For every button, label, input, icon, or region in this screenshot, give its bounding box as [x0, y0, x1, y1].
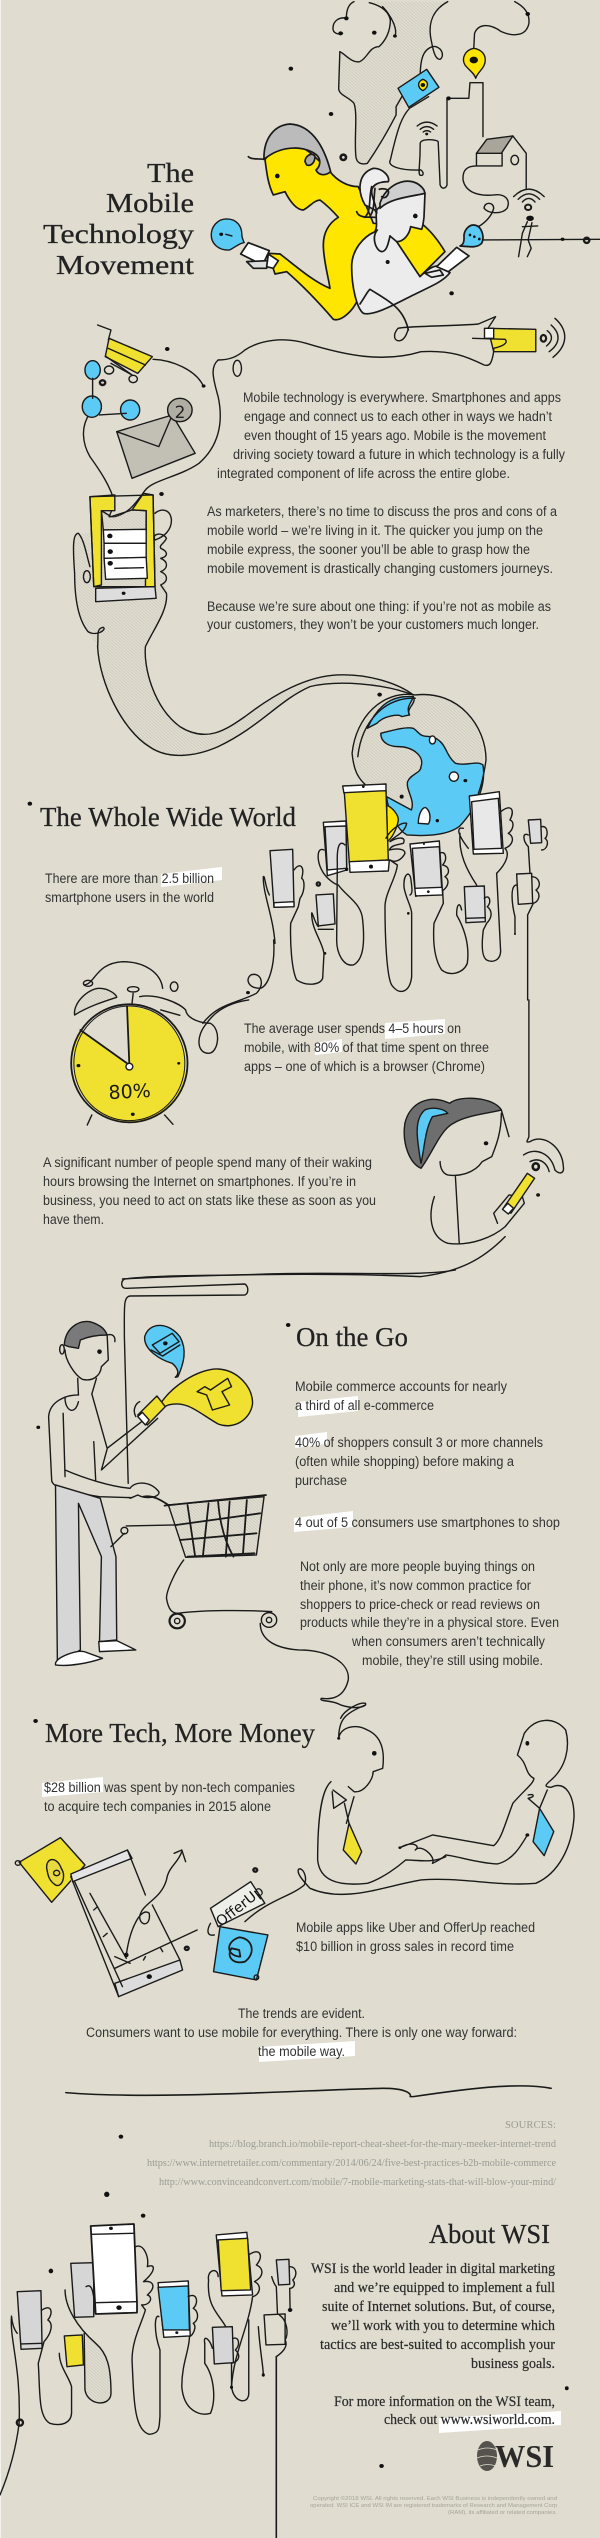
text: money stats and closing: Consumers want to use mobile for everything. There is only one way forward: — [86, 2025, 517, 2040]
dots — [28, 802, 32, 806]
icon: yellow note — [15, 1838, 85, 1902]
figure: man in yellow — [248, 124, 445, 320]
text: world stats: The average user spends 4–5 hours on — [244, 1021, 461, 1036]
icon: small grey phone with hand — [272, 2259, 296, 2313]
text: on the go stats — [295, 1379, 560, 1668]
copyright: Copyright ©2018 WSI. All rights reserved. Each WSI Business is independently owned and — [313, 2495, 557, 2502]
illustration: mobile intro line art, phone, arm and globe — [73, 317, 565, 836]
icon: blue phone — [158, 2281, 214, 2414]
illustration: two businessmen, tablet and app tags — [15, 1705, 574, 2097]
intro text: engage and connect us to each other in ways we hadn’t — [244, 409, 552, 424]
icon: small yellow phone — [64, 2335, 83, 2367]
figure: businessman with blue tie — [245, 1720, 574, 1922]
decorative dots — [289, 16, 454, 295]
line to lower figure — [527, 1000, 564, 1173]
text: on the go stats: 40% of shoppers consult 3 or more channels — [295, 1435, 543, 1450]
figure: woman in light grey — [352, 168, 450, 330]
dots — [317, 795, 439, 955]
text: on the go stats: (often while shopping) before making a — [295, 1454, 514, 1469]
copyright — [310, 2495, 558, 2516]
tag text: OfferUp — [213, 1883, 267, 1930]
text: on the go stats: their phone, it’s now common practice for — [300, 1578, 531, 1593]
icon: yellow map pin — [464, 2, 530, 78]
sources: http://www.convinceandconvert.com/mobile/7-mobile-marketing-stats-that-will-blow-your-mind/ — [159, 2177, 556, 2188]
icon: OfferUp tag — [210, 1882, 265, 1927]
text: world stats: business, you need to act on stats like these as soon as you — [43, 1193, 376, 1208]
text: money stats and closing: to acquire tech companies in 2015 alone — [44, 1799, 271, 1814]
icon: blue app card — [208, 1923, 268, 1980]
icon: globe — [352, 693, 486, 836]
section heading: About WSI: About WSI — [429, 2219, 550, 2249]
figure: businessman with yellow tie — [318, 1705, 446, 1884]
sources: SOURCES: — [505, 2120, 556, 2131]
text: world stats: have them. — [43, 1212, 104, 1227]
icon: raised hand with phone 3 — [318, 821, 364, 965]
text: on the go stats: products while they’re in a physical store. Even — [300, 1615, 559, 1630]
text: on the go stats: mobile, they’re still using mobile. — [362, 1653, 543, 1668]
text: world stats — [43, 871, 489, 1227]
section heading: The Whole Wide World: The Whole Wide World — [40, 802, 296, 832]
icon: thought bubble outline — [83, 360, 220, 517]
clock percent label: 80% — [108, 1080, 151, 1104]
intro text: As marketers, there’s no time to discuss the pros and cons of a — [207, 504, 557, 519]
icon: large light phone 6 — [459, 792, 513, 885]
text: money stats and closing: $28 billion was spent by non-tech companies — [44, 1780, 295, 1795]
title: Movement — [56, 250, 195, 280]
sources: https://blog.branch.io/mobile-report-cheat-sheet-for-the-mary-meeker-internet-trend — [209, 2139, 557, 2150]
illustration: man shopping with cart — [36, 1270, 455, 1718]
text: money stats and closing: Mobile apps like Uber and OfferUp reached — [296, 1920, 535, 1935]
icon: outlined phone with hand — [258, 2314, 287, 2538]
intro text — [207, 390, 565, 632]
illustration: hands holding phones under the globe — [263, 784, 547, 1000]
copyright: operated. WSI ICE and WSI IM are registered trademarks of Research and Management Corp — [310, 2503, 557, 2509]
text: about WSI — [311, 2261, 556, 2428]
icon: cart — [111, 1495, 366, 1718]
icon: grey phone 7 — [204, 2327, 239, 2387]
text: about WSI: business goals. — [471, 2356, 555, 2372]
icon: wifi signal — [417, 122, 437, 135]
intro text: mobile movement is drastically changing customers journeys. — [207, 561, 553, 576]
text: about WSI: WSI is the world leader in digital marketing — [311, 2261, 555, 2277]
title: Mobile — [106, 188, 194, 218]
title: Technology — [43, 219, 195, 249]
icon: blue speech bubble left — [211, 219, 244, 250]
text: world stats: smartphone users in the world — [45, 890, 214, 905]
icon: big white phone — [91, 2224, 160, 2434]
intro text: your customers, they won’t be your customers much longer. — [207, 617, 539, 632]
icon: small phone 5 — [464, 873, 501, 961]
sources: https://www.internetretailer.com/commentary/2014/06/24/five-best-practices-b2b-mobile-commerce — [147, 2158, 556, 2169]
figure: man with phone — [49, 1321, 159, 1665]
icon: alarm clock — [71, 940, 274, 1125]
icon: small far phone 7 and hand 8 — [512, 819, 547, 1000]
icon: blue network nodes — [82, 347, 170, 420]
text: money stats and closing: The trends are evident. — [238, 2006, 365, 2021]
illustration: alarm clock and woman — [28, 802, 564, 1279]
icon: blue money drop — [145, 1325, 184, 1377]
text: on the go stats: shoppers to price-check or read reviews on — [300, 1597, 540, 1612]
text: about WSI: For more information on the WSI team, — [334, 2394, 555, 2410]
icon: blue speech bubble right — [460, 225, 483, 247]
stat highlight marks — [294, 1396, 358, 1532]
decorative ring dot — [341, 155, 346, 160]
icon: yellow speech blob with shirt — [138, 1369, 253, 1426]
dots — [36, 1323, 290, 1429]
text: money stats and closing — [44, 1780, 535, 2059]
figure: woman with phone — [122, 1098, 555, 1279]
icon: yellow phone in hand — [343, 784, 412, 991]
intro text: driving society toward a future in which technology is a fully — [233, 447, 565, 462]
stat highlight marks — [42, 1777, 355, 2062]
text: on the go stats: 4 out of 5 consumers use smartphones to shop — [295, 1515, 560, 1530]
icon: shopping cart — [98, 325, 206, 388]
icon: raised hand with phone 4 — [410, 841, 468, 973]
text: world stats: hours browsing the Internet on smartphones. If you’re in — [43, 1174, 356, 1189]
text: on the go stats: Not only are more people buying things on — [300, 1559, 535, 1574]
intro text: even thought of 15 years ago. Mobile is the movement — [244, 428, 546, 443]
text: on the go stats: a third of all e-commerce — [295, 1398, 434, 1413]
title: The — [147, 158, 194, 188]
text: on the go stats: Mobile commerce accounts for nearly — [295, 1379, 507, 1394]
text: on the go stats: when consumers aren’t technically — [351, 1634, 545, 1649]
text: about WSI: suite of Internet solutions. But, of course, — [322, 2299, 555, 2315]
icon: hand with grey phone 1 — [263, 849, 324, 984]
icon: house — [463, 136, 526, 227]
icon: blue phone with pin — [398, 69, 439, 107]
icon: hatched arm lower edge — [98, 647, 413, 755]
icon: envelope badge number: 2 — [175, 403, 185, 423]
icon: yellow phone in outstretched hand — [218, 317, 565, 376]
link highlight — [439, 2411, 561, 2433]
copyright: (RAM), its affiliated or related companies. — [448, 2510, 558, 2516]
intro text: integrated component of life across the entire globe. — [217, 466, 510, 481]
dots — [49, 2135, 569, 2468]
illustration: raised hands with phones — [0, 2135, 569, 2538]
icon: white phone left — [241, 243, 278, 268]
logo: WSI: WSI — [495, 2438, 554, 2474]
title — [43, 158, 195, 280]
illustration: two people on phones — [241, 124, 483, 330]
text: world stats: mobile, with 80% of that time spent on three — [244, 1040, 489, 1055]
icon: small walking person with wifi — [482, 189, 600, 257]
icon: small grey phone 2 — [316, 894, 335, 929]
text: money stats and closing: the mobile way. — [258, 2044, 345, 2059]
sources — [147, 2120, 557, 2188]
intro text: mobile express, the sooner you’ll be able to grasp how the — [207, 542, 530, 557]
icon: phone with list in hatched hand — [73, 492, 413, 755]
text: world stats: A significant number of people spend many of their waking — [43, 1155, 372, 1170]
icon: grey phone behind hatched arm — [65, 2263, 111, 2403]
text: about WSI: we’ll work with you to determine which — [331, 2318, 556, 2334]
intro text: Because we’re sure about one thing: if you’re not as mobile as — [207, 599, 551, 614]
icon: yellow phone — [208, 2232, 262, 2401]
section heading: On the Go: On the Go — [296, 1322, 408, 1352]
stat highlight marks — [161, 867, 445, 1055]
text: money stats and closing: $10 billion in gross sales in record time — [296, 1939, 514, 1954]
text: world stats: There are more than 2.5 billion — [45, 871, 214, 886]
text: about WSI: tactics are best-suited to accomplish your — [320, 2337, 555, 2353]
icon: tablet with growth chart — [71, 1850, 257, 1997]
illustration: city line art above the people — [211, 2, 600, 295]
divider line — [66, 2086, 551, 2097]
intro text: mobile world – we’re living in it. The quicker you jump on the — [207, 523, 543, 538]
text: on the go stats: purchase — [295, 1473, 347, 1488]
text: world stats: apps – one of which is a browser (Chrome) — [244, 1059, 485, 1074]
text: about WSI: check out www.wsiworld.com. — [384, 2412, 555, 2428]
intro text: Mobile technology is everywhere. Smartphones and apps — [243, 390, 561, 405]
icon: white phone right — [425, 247, 469, 277]
icon: envelope with badge — [117, 398, 195, 478]
text: about WSI: and we’re equipped to implement a full — [334, 2280, 555, 2296]
section heading: More Tech, More Money: More Tech, More Money — [45, 1718, 315, 1748]
icon: hand with grey phone 1 — [0, 2291, 72, 2495]
